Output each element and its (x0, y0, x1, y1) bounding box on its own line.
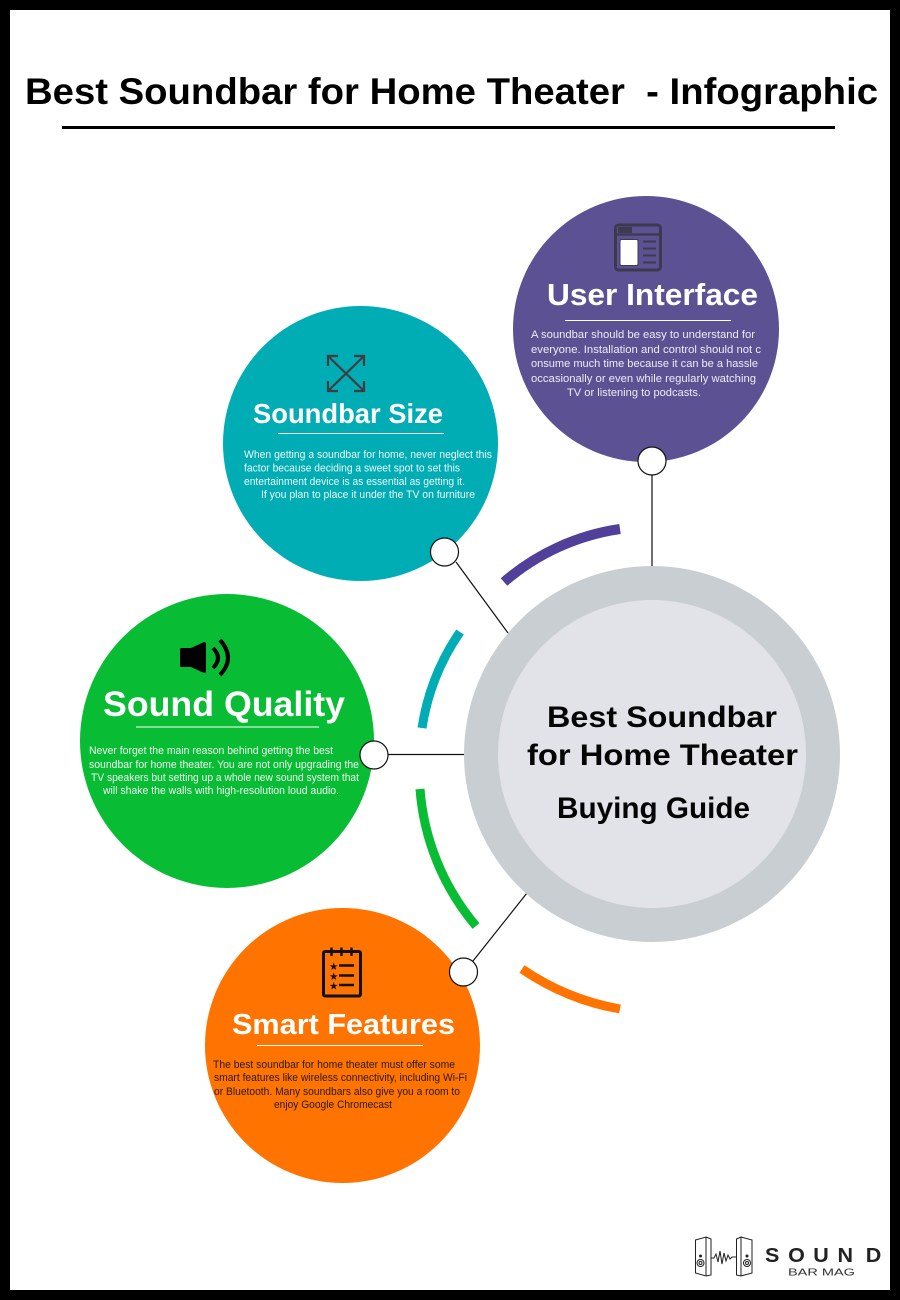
arc: green (420, 789, 476, 926)
text: sound quality: Never forget the main reason behind getting the best (89, 745, 333, 757)
panel: soundbar size (223, 306, 498, 581)
text: soundbar size (244, 449, 492, 501)
text: sound quality: TV speakers but setting up a whole new sound system that (91, 772, 359, 784)
heading: user interface: User Interface (547, 277, 758, 312)
logo wordmark: SOUND (765, 1244, 881, 1267)
text: user interface: A soundbar should be easy to understand for (531, 329, 755, 341)
panel: user interface (513, 196, 779, 462)
arc: orange (522, 969, 620, 1009)
logo: sound bar mag (696, 1237, 881, 1278)
icon: browser window (615, 225, 660, 270)
text: soundbar size: factor because deciding a sweet spot to set this (244, 462, 460, 474)
connector: soundbar size (456, 562, 508, 633)
icon: notepad with stars (324, 948, 360, 996)
icon: speakers with waveform (696, 1237, 752, 1276)
central heading: Buying Guide (557, 792, 750, 825)
text: smart features: smart features like wireless connectivity, including Wi-Fi (214, 1072, 467, 1084)
text: user interface: onsume much time because it can be a hassle (531, 358, 758, 370)
icon: notepad with stars: ★ (329, 971, 338, 983)
icon: notepad with stars: ★ (329, 980, 338, 992)
connector: sound quality (374, 754, 465, 756)
text: soundbar size: If you plan to place it under the TV on furniture (261, 489, 475, 501)
title (25, 71, 878, 129)
icon: expand arrows (328, 356, 364, 391)
central heading: Best Soundbar (547, 701, 778, 734)
text: sound quality (89, 745, 359, 797)
heading: soundbar size: Soundbar Size (253, 398, 443, 429)
icon: speaker (180, 640, 228, 675)
panel: central buying guide (464, 566, 840, 942)
logo wordmark (765, 1244, 881, 1278)
text: smart features: or Bluetooth. Many soundbars also give you a room to (214, 1086, 460, 1098)
title: Best Soundbar for Home Theater - Infographic (25, 71, 878, 112)
text: soundbar size: When getting a soundbar for home, never neglect this (244, 449, 492, 461)
connector: user interface (651, 462, 653, 567)
text: sound quality: soundbar for home theater. You are not only upgrading the (89, 759, 359, 771)
text: user interface: TV or listening to podcasts. (567, 387, 701, 399)
text: smart features: enjoy Google Chromecast (274, 1099, 392, 1111)
text: user interface: occasionally or even while regularly watching (531, 373, 756, 385)
connector: smart features (473, 893, 527, 961)
heading: sound quality: Sound Quality (103, 685, 346, 724)
panel: smart features (205, 908, 480, 1183)
logo wordmark: BAR MAG (788, 1266, 855, 1278)
arc: purple (504, 529, 620, 582)
node: sound quality (360, 741, 388, 769)
heading: smart features: Smart Features (232, 1009, 455, 1041)
node: smart features (450, 958, 478, 986)
central heading: for Home Theater (527, 739, 799, 772)
text: user interface: everyone. Installation and control should not c (531, 344, 762, 356)
text: smart features: The best soundbar for home theater must offer some (213, 1059, 455, 1071)
central heading (527, 701, 799, 825)
node: user interface (638, 447, 666, 475)
icon: notepad with stars: ★ (329, 961, 338, 973)
panel: sound quality (80, 594, 374, 888)
text: sound quality: will shake the walls with high-resolution loud audio. (102, 785, 339, 797)
arc: teal (422, 632, 460, 728)
node: soundbar size (430, 538, 458, 566)
text: user interface (531, 329, 762, 399)
text: soundbar size: entertainment device is as essential as getting it. (244, 476, 465, 488)
text: smart features (213, 1059, 467, 1111)
